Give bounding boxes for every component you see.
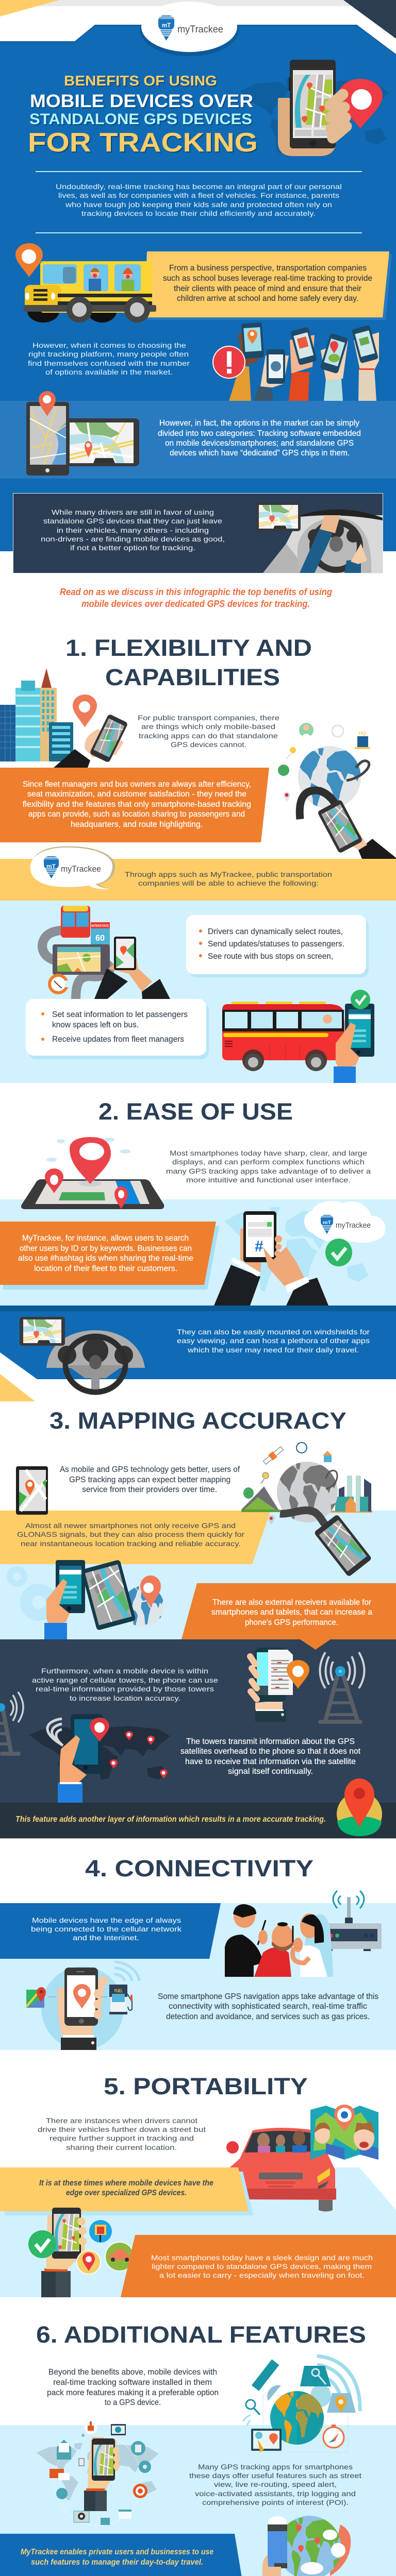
icon: tablet with map	[16, 1466, 48, 1515]
text: towers transmit: have to receive that information via the satellite	[185, 1757, 356, 1766]
text: mapping service: As mobile and GPS technology gets better, users of	[60, 1465, 240, 1474]
icon: tablet with pins	[21, 1137, 164, 1209]
text: drivers: if not a better option for tracking.	[70, 544, 195, 552]
text: towers transmit: satellites overhead to the phone so that it does not	[180, 1747, 361, 1756]
city skyline	[330, 1476, 372, 1513]
panel: yellow MyTrackee band	[0, 846, 396, 901]
icon: globe with road and phone	[278, 723, 396, 859]
callout text: From a business perspective, transportation companies	[169, 264, 367, 273]
magnifier	[261, 1472, 269, 1484]
text: beyond benefits: pack more features making it a preferable option	[47, 2388, 219, 2397]
title: BENEFITS OF USING	[64, 73, 217, 89]
text: useful features: voice-activated assistants, trip logging and	[195, 2489, 356, 2498]
text: drivers cannot drive	[38, 2116, 206, 2151]
panel: additional features	[0, 2356, 396, 2576]
divider top	[36, 171, 362, 172]
panel: orange MyTrackee search: location of their fleet to their customers.	[34, 1264, 177, 1273]
text: cellular towers: real-time information provided by those towers	[36, 1685, 214, 1693]
icon: router with antenna	[324, 1891, 382, 1951]
icon: dashboard and GPS	[20, 1317, 145, 1392]
text: drivers: non-drivers - are finding mobile devices as good,	[41, 535, 225, 543]
heading: section 1: 1. FLEXIBILITY AND	[65, 635, 312, 661]
text: nav apps: Some smartphone GPS navigation apps take advantage of this	[158, 1992, 378, 2001]
text: towers transmit	[180, 1737, 361, 1776]
panel: orange MyTrackee search: other users by ID or by keywords. Businesses can	[20, 1244, 192, 1253]
text: two categories	[158, 419, 361, 457]
icon: HQ building: HQ	[359, 731, 366, 736]
logo badge	[134, 2, 245, 52]
intro text: Undoubtedly, real-time tracking has become an integral part of our personal	[56, 182, 342, 191]
callout: read on: mobile devices over dedicated GPS devices for tracking.	[81, 599, 310, 609]
heading: section 1: CAPABILITIES	[105, 664, 280, 690]
icon: grey globe, city and phone	[241, 1443, 372, 1577]
icon: phone with world map and app icons	[36, 2421, 159, 2526]
icon: people with phones	[225, 1904, 333, 1977]
callout: read on	[60, 587, 332, 609]
logo badge: mT	[162, 22, 171, 29]
icon: fuel pump	[109, 1985, 133, 2014]
icon: orange globe with satellite and tools	[243, 2356, 360, 2452]
panel: navy drivers box	[13, 493, 383, 573]
text: smartphones displays: more intuitive and functional user interface.	[186, 1176, 351, 1184]
icon: hand holding phone with map	[278, 60, 383, 156]
callout: extra layer: This feature adds another layer of information which results in a more accurate tracking.	[15, 1815, 326, 1824]
icon: fuel pump: FUEL	[114, 1988, 123, 1993]
text: windshields	[177, 1328, 370, 1354]
icon: red bus with phone	[222, 990, 374, 1083]
intro text: tracking devices to locate their child efficiently and accurately.	[81, 209, 316, 217]
panel: orange MyTrackee search	[0, 1222, 219, 1290]
panel: orange fleet managers	[0, 768, 269, 842]
mountains	[241, 1486, 280, 1512]
text: drivers cannot drive: There are instances when drivers cannot	[46, 2116, 197, 2125]
text: beyond benefits	[47, 2368, 219, 2407]
panel: light blue benefits	[0, 901, 396, 1083]
text: public transport: GPS devices cannot.	[171, 740, 246, 749]
intro text	[56, 182, 342, 217]
callout text: children arrive at school and home safely every day.	[177, 294, 358, 303]
panel: header	[0, 0, 396, 551]
text: nav apps	[158, 1992, 378, 2021]
text: towers transmit: The towers transmit information about the GPS	[186, 1737, 355, 1746]
icon: red car with map	[226, 2128, 336, 2211]
satellite	[262, 1445, 284, 1466]
text: fleet managers	[23, 780, 251, 829]
text: smartphones displays: displays, and can perform complex functions which	[172, 1158, 365, 1166]
text: windshields: easy viewing, and can host a plethora of other apps	[177, 1336, 370, 1345]
text: public transport: tracking apps can do that standalone	[139, 732, 278, 740]
icon: hands holding phones	[212, 323, 379, 401]
panel: orange external receivers	[182, 1583, 396, 1639]
text: fleet managers: apps can provide, such as location sharing to passengers and	[28, 810, 245, 819]
text: apps	[125, 870, 332, 887]
icon: HQ building	[355, 731, 370, 749]
text: useful features: view, live re-routing, speed alert,	[214, 2480, 337, 2488]
icon: world map with pins and phone	[29, 1714, 170, 1803]
text: choosing platform: find themselves confused with the number	[28, 359, 190, 367]
text: useful features: Many GPS tracking apps for smartphones	[198, 2463, 353, 2471]
panel: light blue base	[0, 1511, 396, 1639]
text: beyond benefits: to a GPS device.	[105, 2398, 161, 2407]
icon: right cell tower	[318, 1652, 364, 1724]
icon: bus on road with navigation device	[42, 906, 170, 999]
icon: compass	[332, 725, 343, 737]
text: two categories: divided into two categories: Tracking software embedded	[158, 429, 361, 438]
text: two categories: on mobile devices/smartphones; and standalone GPS	[165, 439, 354, 448]
panel: two categories band	[0, 391, 396, 479]
text: apps: companies will be able to achieve the following:	[138, 879, 319, 887]
heading: section 1	[65, 635, 312, 690]
text: smartphones displays: Most smartphones today have sharp, clear, and large	[170, 1149, 367, 1157]
panel: yellow edge callout: It is at these times where mobile devices have the	[39, 2179, 213, 2188]
icon: bus on road with navigation device: 60	[95, 933, 105, 943]
text: choosing platform	[28, 341, 190, 376]
text: beyond benefits: real-time tracking software installed in them	[53, 2378, 212, 2387]
text: windshields: which the user may need for their daily travel.	[187, 1346, 359, 1354]
callout: read on: Read on as we discuss in this infographic the top benefits of using	[60, 587, 332, 597]
text: drivers: in their vehicles, many others - including	[57, 526, 209, 534]
text: cellular towers	[32, 1667, 218, 1702]
speech bubble logo: mT	[46, 863, 56, 870]
heading: section 2: 2. EASE OF USE	[98, 1098, 293, 1125]
icon: globe with phone and clouds	[262, 2516, 351, 2576]
compass	[296, 1443, 307, 1453]
icon: phone and tablet maps	[26, 391, 139, 476]
callout text: their clients with peace of mind and ensure that their	[174, 284, 362, 293]
panel: yellow GLONASS: GLONASS signals, but they can also process them quickly for	[17, 1530, 244, 1538]
icon: map pin on globe	[337, 1778, 382, 1836]
speech bubble logo	[30, 846, 115, 889]
icon: cloud with logo and check: myTrackee	[336, 1221, 371, 1230]
text: drivers: standalone GPS devices that they can just leave	[43, 517, 222, 525]
panel: blue windshield	[0, 1306, 396, 1401]
house	[323, 1451, 332, 1462]
panel: school bus callout	[15, 243, 392, 323]
heading: section 5: 5. PORTABILITY	[104, 2073, 308, 2099]
text: choosing platform: right tracking platform, many people often	[28, 350, 189, 358]
text: cellular towers: active range of cellular towers, the phone can use	[32, 1676, 218, 1684]
card: benefits two: Set seat information to let passengers	[52, 1010, 188, 1019]
icon: folded map with faces	[310, 2105, 378, 2160]
text: nav apps: detection and avoidance, and services such as gas prices.	[166, 2012, 370, 2021]
icon: cloud with logo and check	[304, 1201, 386, 1266]
text: two categories: devices which have “dedicated” GPS chips in them.	[170, 449, 350, 457]
icon: driver at wheel with GPS	[256, 502, 383, 573]
text: drivers cannot drive: require further support in tracking and	[50, 2134, 194, 2142]
intro text: who have tough job keeping their kids safe and protected often rely on	[65, 200, 332, 209]
logo badge: myTrackee	[177, 24, 223, 35]
text: choosing platform: However, when it comes to choosing the	[32, 341, 186, 349]
panel: portability	[0, 2105, 396, 2297]
text: useful features: these days offer useful features such as street	[189, 2471, 361, 2480]
text: apps: Through apps such as MyTrackee, public transportation	[125, 870, 332, 878]
panel: yellow GLONASS: near instantaneous location tracking and reliable accuracy.	[21, 1539, 241, 1548]
text: mapping service	[60, 1465, 240, 1494]
speech bubble logo: myTrackee	[61, 864, 101, 874]
intro text: lives, as well as for companies with a fleet of vehicles. For instance, parents	[58, 191, 339, 199]
icon: phone with app circles	[28, 2207, 135, 2297]
card: benefits one: Drivers can dynamically select routes,	[208, 927, 343, 936]
panel: connectivity	[0, 1891, 396, 2050]
icons around phone	[50, 2421, 151, 2525]
text: drivers	[41, 508, 225, 552]
panel: orange MyTrackee search: MyTrackee, for instance, allows users to search	[22, 1234, 189, 1243]
text: choosing platform: of options available in the market.	[45, 368, 173, 376]
title: MOBILE DEVICES OVER	[30, 91, 253, 111]
title: FOR TRACKING	[28, 128, 258, 158]
panel: blue private users callout	[0, 2534, 242, 2576]
title	[28, 73, 258, 158]
icon: phone and tablet with gears	[7, 1560, 167, 1639]
icon: green globe	[278, 765, 289, 776]
card: benefits two	[26, 999, 209, 1059]
panel: yellow GLONASS: Almost all newer smartphones not only receive GPS and	[25, 1521, 236, 1530]
heading: section 3: 3. MAPPING ACCURACY	[50, 1408, 346, 1434]
heading: section 6: 6. ADDITIONAL FEATURES	[36, 2321, 366, 2348]
text: nav apps: connectivity with sophisticated search, real-time traffic	[169, 2002, 367, 2011]
card: benefits one	[186, 915, 369, 977]
text: drivers cannot drive: sharing their current location.	[66, 2143, 177, 2151]
panel: light blue ease of use	[0, 1137, 396, 1306]
panel: orange sleek design: lighter compared to standalone GPS devices, making them	[152, 2262, 372, 2270]
panel: orange sleek design: Most smartphones today have a sleek design and are much	[151, 2253, 373, 2262]
text: public transport: are things which only mobile-based	[141, 722, 275, 731]
panel: blue network callout: Mobile devices have the edge of always	[32, 1916, 181, 1924]
icon: small pin	[284, 792, 290, 802]
heading: section 4: 4. CONNECTIVITY	[85, 1855, 314, 1882]
panel: yellow edge callout: edge over specialized GPS devices.	[66, 2189, 187, 2197]
panel: blue private users callout: MyTrackee enables private users and businesses to use	[21, 2548, 213, 2556]
icon: phone with document and pin	[250, 1648, 309, 1722]
icon: hands with hashtag phone: #	[255, 1238, 263, 1255]
divider bottom	[36, 232, 362, 233]
icon: bus on road with navigation device: INTERSTATE	[91, 925, 109, 928]
icon: left cell tower	[0, 1692, 23, 1756]
text: beyond benefits: Beyond the benefits above, mobile devices with	[48, 2368, 217, 2377]
panel: blue network callout: and the Interiinet.	[73, 1934, 139, 1942]
icon: hand holding phone with salmon pin	[54, 694, 128, 768]
text: towers transmit: signal itself continually.	[228, 1767, 313, 1776]
card: benefits two: know spaces left on bus.	[52, 1021, 139, 1029]
text: windshields: They can also be easily mounted on windshields for	[177, 1328, 370, 1336]
icon: city buildings	[0, 668, 73, 761]
panel: orange sleek design	[121, 2235, 396, 2297]
panel: orange MyTrackee search: also use #hashtag ids when sharing the real-time	[18, 1254, 193, 1263]
text: cellular towers: to increase location accuracy.	[70, 1694, 180, 1702]
world map watermark	[240, 78, 389, 154]
panel: orange external receivers: phone's GPS performance.	[245, 1618, 338, 1627]
text: cellular towers: Furthermore, when a mobile device is within	[41, 1667, 208, 1675]
text: drivers cannot drive: drive their vehicles further down a street but	[38, 2125, 206, 2133]
panel: blue network callout: being connected to the cellular network	[31, 1925, 182, 1933]
panel: blue private users callout: such features to manage their day-to-day travel.	[31, 2558, 203, 2567]
text: smartphones displays	[166, 1149, 371, 1184]
text: fleet managers: Since fleet managers and bus owners are always after efficiency,	[23, 780, 251, 789]
panel: navy cellular towers	[0, 1639, 396, 1839]
text: drivers: While many drivers are still in favor of using	[52, 508, 214, 516]
panel: orange external receivers: There are also external receivers available for	[212, 1598, 372, 1607]
panel: yellow edge callout	[0, 2167, 253, 2215]
icon: magnifier	[286, 747, 296, 759]
title: STANDALONE GPS DEVICES	[29, 111, 252, 128]
panel: blue network callout	[0, 1903, 221, 1959]
panel: orange sleek design: a lot easier to carry - especially when traveling on foot.	[159, 2271, 365, 2279]
panel: yellow GLONASS	[0, 1511, 271, 1564]
text: public transport: For public transport companies, there	[138, 714, 279, 722]
card: benefits one: See route with bus stops on screen,	[208, 952, 333, 961]
text: two categories: However, in fact, the options in the market can be simply	[159, 419, 359, 428]
text: mapping service: service from their providers over time.	[82, 1485, 217, 1494]
icon: cloud with logo and check: mT	[323, 1220, 332, 1225]
text: fleet managers: flexibility and the features that only smartphone-based tracking	[23, 800, 251, 809]
icon: hands with hashtag phone	[214, 1211, 328, 1306]
icon: school bus	[15, 243, 156, 323]
panel: orange external receivers: smartphones and tablets, that can increase a	[211, 1608, 372, 1617]
text: fleet managers: seat maximization, and customer satisfaction - they need the	[27, 790, 246, 799]
small pin	[268, 1515, 275, 1525]
text: useful features	[189, 2463, 361, 2506]
text: useful features: comprehensive points of interest (POI).	[202, 2498, 349, 2506]
icon: maps app	[26, 1987, 108, 2008]
text: smartphones displays: many GPS tracking apps take advantage of to deliver a	[166, 1167, 371, 1175]
text: mapping service: GPS tracking apps can expect better mapping	[69, 1476, 230, 1484]
callout text: such as school buses leverage real-time tracking to provide	[163, 274, 372, 283]
text: fleet managers: headquarters, and route highlighting.	[71, 820, 203, 829]
text: public transport	[138, 714, 279, 749]
callout text	[163, 264, 372, 303]
card: benefits two: Receive updates from fleet managers	[52, 1035, 184, 1044]
icon: person	[299, 723, 314, 737]
green globe	[243, 1487, 254, 1499]
card: benefits one: Send updates/statuses to passengers.	[208, 940, 344, 948]
icon: phone with pin, maps and fuel	[26, 1962, 139, 2050]
